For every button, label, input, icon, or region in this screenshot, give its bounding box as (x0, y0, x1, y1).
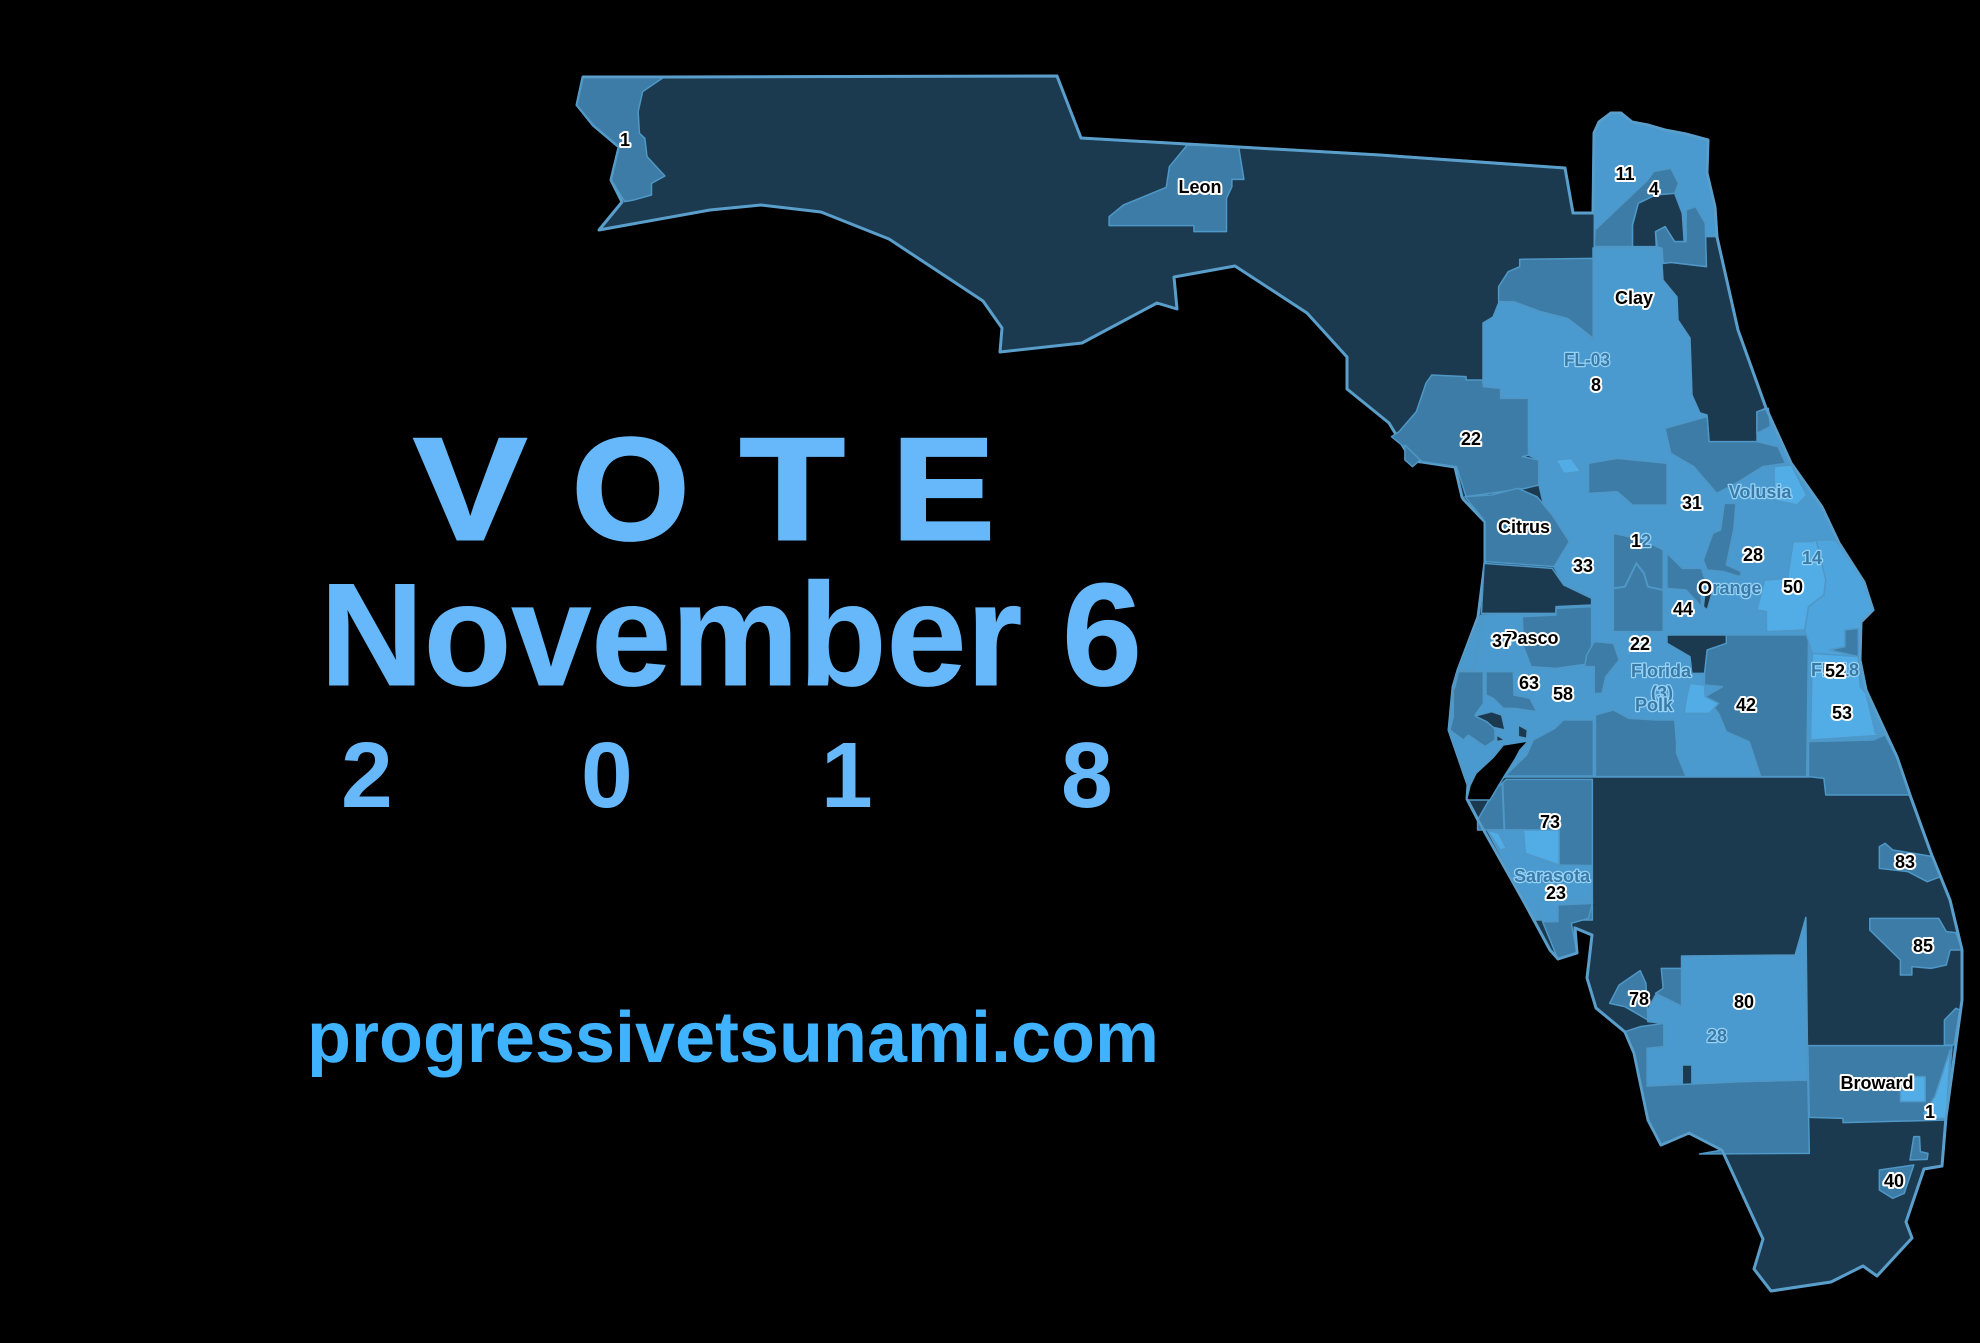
state coastline highlight (583, 76, 1962, 1291)
state base shape (577, 76, 1962, 1291)
county and district number labels: Clay (1615, 288, 1653, 308)
panhandle counties (577, 77, 1244, 232)
title: VOTE: O (572, 409, 689, 570)
county and district number labels: Broward (1840, 1073, 1914, 1093)
county and district number labels: Citrus (1498, 517, 1550, 537)
light district labels: 2 (1641, 531, 1651, 551)
county and district number labels: 83 (1895, 852, 1915, 872)
county and district number labels: 53 (1832, 703, 1852, 723)
light district labels: 28 (1707, 1026, 1727, 1046)
county and district number labels: 22 (1461, 429, 1481, 449)
date: November 6: November 6 (320, 553, 1142, 716)
county and district number labels: Leon (1178, 177, 1222, 197)
website url: progressivetsunami.com (307, 998, 1159, 1078)
title: VOTE: E (892, 408, 995, 570)
county and district number labels: 28 (1743, 545, 1763, 565)
county and district number labels: 80 (1734, 992, 1754, 1012)
central Florida districts (1458, 488, 1941, 920)
county and district number labels: 44 (1673, 599, 1693, 619)
county and district number labels: 40 (1884, 1171, 1904, 1191)
light district labels: 14 (1802, 548, 1822, 568)
light district labels: Volusia (1729, 482, 1792, 502)
light district labels: Sarasota (1514, 866, 1591, 886)
year: 2018: 2018 (341, 723, 1113, 827)
title: VOTE: V (414, 409, 526, 570)
title: VOTE (414, 407, 995, 570)
county and district number labels: 37 (1492, 631, 1512, 651)
county and district number labels: 73 (1540, 812, 1560, 832)
title: VOTE: T (740, 407, 845, 570)
light district labels: Orange (1698, 578, 1762, 598)
county and district number labels: 22 (1630, 634, 1650, 654)
county and district number labels: Pasco (1505, 628, 1559, 648)
county and district number labels: 63 (1519, 673, 1539, 693)
county and district number labels: 8 (1591, 375, 1601, 395)
south Florida districts (1535, 900, 1962, 1198)
light district labels: (3) (1651, 683, 1673, 703)
county and district number labels: 78 (1629, 989, 1649, 1009)
county and district number labels: 50 (1783, 577, 1803, 597)
light district labels: FL-18 (1811, 660, 1859, 680)
county and district number labels: 1 (620, 130, 630, 150)
county and district number labels: 4 (1649, 179, 1659, 199)
central Florida light region (1449, 248, 1885, 785)
light district labels: Florida (1631, 661, 1692, 681)
map of Florida (577, 76, 1962, 1291)
county and district number labels: 52 (1825, 661, 1845, 681)
county and district number labels: 1 (1925, 1102, 1935, 1122)
county and district number labels: 1 (1631, 531, 1641, 551)
county and district number labels: 33 (1573, 556, 1593, 576)
Tampa Bay area districts (1450, 672, 1593, 800)
light district labels: FL-03 (1564, 350, 1610, 370)
county and district number labels: 11 (1615, 164, 1635, 184)
county and district number labels: 85 (1913, 936, 1933, 956)
county and district number labels (620, 130, 1935, 1191)
light district labels: Polk (1635, 695, 1674, 715)
north Florida districts (1391, 113, 1807, 505)
light district labels (1514, 350, 1859, 1046)
county and district number labels: 42 (1736, 695, 1756, 715)
county and district number labels: 31 (1682, 493, 1702, 513)
county and district number labels: 58 (1553, 684, 1573, 704)
county and district number labels: O (1698, 578, 1712, 598)
county and district number labels: 23 (1546, 883, 1566, 903)
